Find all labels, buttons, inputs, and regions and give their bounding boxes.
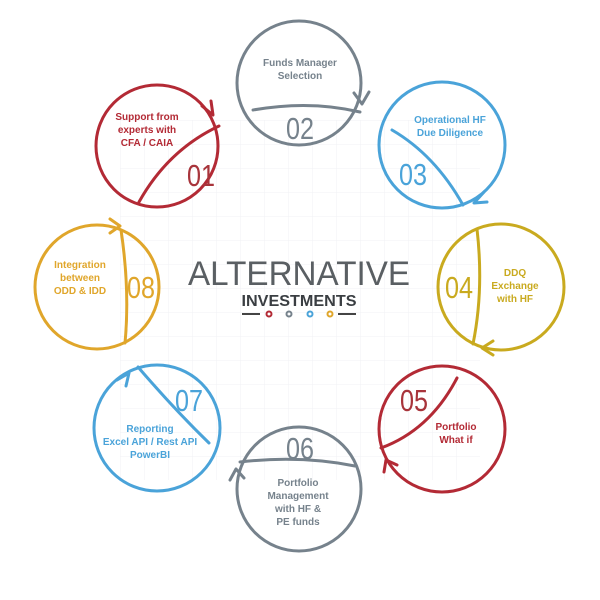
arrow 05 [384, 460, 397, 472]
panel: 06 portfolio management: 06 [286, 431, 314, 466]
chord 03 [392, 130, 463, 205]
panel: 07 reporting: 07 [175, 383, 203, 418]
panel: 07 reporting: Excel API / Rest API [103, 437, 197, 448]
chord 07 [138, 367, 209, 443]
panel: 08 integration [35, 219, 159, 349]
panel: 08 integration: Integration [54, 260, 106, 271]
panel: 05 portfolio what if: 05 [400, 383, 428, 418]
panel: 03 operational HF due diligence: 03 [399, 157, 427, 192]
panel: 04 DDQ exchange: Exchange [491, 281, 539, 292]
panel: 08 integration: between [60, 273, 100, 284]
panel: 05 portfolio what if: Portfolio [435, 422, 477, 433]
chord 01 [139, 126, 219, 202]
arrow 07 [117, 373, 129, 386]
panel: 01 support from experts: CFA / CAIA [121, 138, 173, 149]
title: INVESTMENTS [242, 293, 357, 310]
panel: 07 reporting [94, 365, 220, 491]
panel: 05 portfolio what if: What if [439, 435, 473, 446]
panel: 05 portfolio what if [379, 366, 505, 492]
panel: 01 support from experts [96, 85, 219, 207]
panel: 01 support from experts: experts with [118, 125, 176, 136]
title [188, 255, 410, 316]
panel: 02 funds manager selection: 02 [286, 111, 314, 146]
panel: 06 portfolio management [230, 427, 361, 551]
panel: 08 integration: ODD & IDD [54, 286, 106, 297]
panel: 04 DDQ exchange: DDQ [504, 268, 526, 279]
arrow 01 [202, 101, 213, 115]
panel: 06 portfolio management: Portfolio [277, 478, 319, 489]
arrow 03 [474, 192, 487, 203]
title: ALTERNATIVE [188, 255, 410, 293]
panel: 06 portfolio management: PE funds [276, 517, 320, 528]
panel: 06 portfolio management: with HF & [274, 504, 321, 515]
panel: 04 DDQ exchange: with HF [496, 294, 533, 305]
chord 04 [473, 229, 480, 344]
chord 05 [381, 378, 457, 448]
chord 08 [121, 230, 127, 343]
panel: 07 reporting: Reporting [126, 424, 174, 435]
panel: 06 portfolio management: Management [267, 491, 329, 502]
panel: 03 operational HF due diligence: Operational HF [414, 115, 486, 126]
arrow 06 [230, 469, 244, 480]
arrow 08 [110, 219, 120, 233]
panel: 04 DDQ exchange [438, 224, 564, 355]
arrow 02 [354, 92, 369, 104]
panel: 08 integration: 08 [127, 270, 155, 305]
panel: 02 funds manager selection: Funds Manager [263, 58, 337, 69]
panel: 02 funds manager selection [237, 21, 369, 146]
panel: 07 reporting: PowerBI [130, 450, 170, 461]
panel: 03 operational HF due diligence [379, 82, 505, 208]
panel: 02 funds manager selection: Selection [278, 71, 322, 82]
chord 06 [240, 459, 355, 466]
chord 02 [253, 105, 360, 112]
legend dots [242, 312, 356, 316]
panel: 01 support from experts: Support from [115, 112, 179, 123]
panel: 03 operational HF due diligence: Due Diligence [417, 128, 483, 139]
panel: 01 support from experts: 01 [187, 158, 215, 193]
arrow 04 [482, 341, 493, 355]
panel: 04 DDQ exchange: 04 [445, 270, 473, 305]
